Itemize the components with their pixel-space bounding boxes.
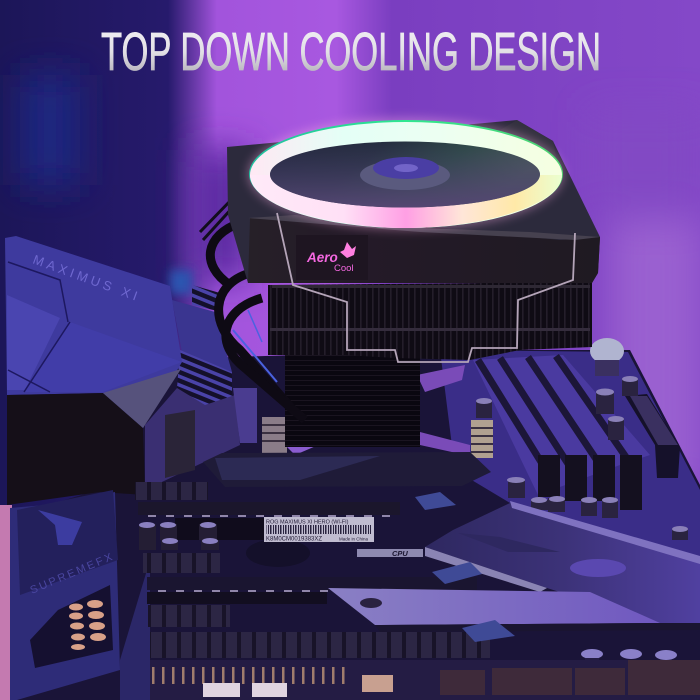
spring screws and brackets xyxy=(233,365,493,458)
fan housing xyxy=(227,120,600,283)
fan blades xyxy=(270,142,540,208)
Aerocool logo badge: Cool xyxy=(334,263,354,274)
motherboard base xyxy=(0,350,700,700)
chokes xyxy=(69,600,106,650)
expansion slots xyxy=(135,482,490,684)
silver M.2 cover xyxy=(328,588,700,632)
left VRM heatsink xyxy=(5,236,182,505)
serial number label: K8M0CM0019383XZ xyxy=(266,536,322,542)
RAM slot end clips xyxy=(538,455,642,510)
ATX power connector xyxy=(625,394,680,478)
heatsink name: SUPREMEFX xyxy=(28,551,115,597)
fan hub xyxy=(360,157,450,190)
cooler fin stack xyxy=(268,282,592,360)
lower left heatsink xyxy=(0,490,120,700)
heatsink name: MAXIMUS XI xyxy=(31,252,139,303)
mounting plate xyxy=(203,452,491,487)
CPU marking strip xyxy=(357,549,423,558)
RAM slots xyxy=(473,355,650,510)
serial number label: Made in China xyxy=(339,536,369,542)
capacitors centre xyxy=(139,522,310,567)
serial number label: ROG MAXIMUS XI HERO (WI-FI) xyxy=(266,520,349,526)
RGB fan ring xyxy=(248,118,564,230)
CMOS battery xyxy=(246,539,310,567)
SATA connectors and bottom headers xyxy=(203,492,700,697)
Aerocool logo badge: Aero xyxy=(306,250,338,265)
capacitors right xyxy=(476,338,688,540)
wire clip xyxy=(277,213,575,362)
lower heatsink block xyxy=(285,352,420,447)
chipset cover xyxy=(425,501,700,623)
serial number label xyxy=(264,517,374,542)
Aerocool logo badge xyxy=(296,235,368,280)
CPU marking strip: CPU xyxy=(392,549,408,558)
VRM fins and side block xyxy=(145,285,240,490)
heatpipes xyxy=(200,198,305,420)
